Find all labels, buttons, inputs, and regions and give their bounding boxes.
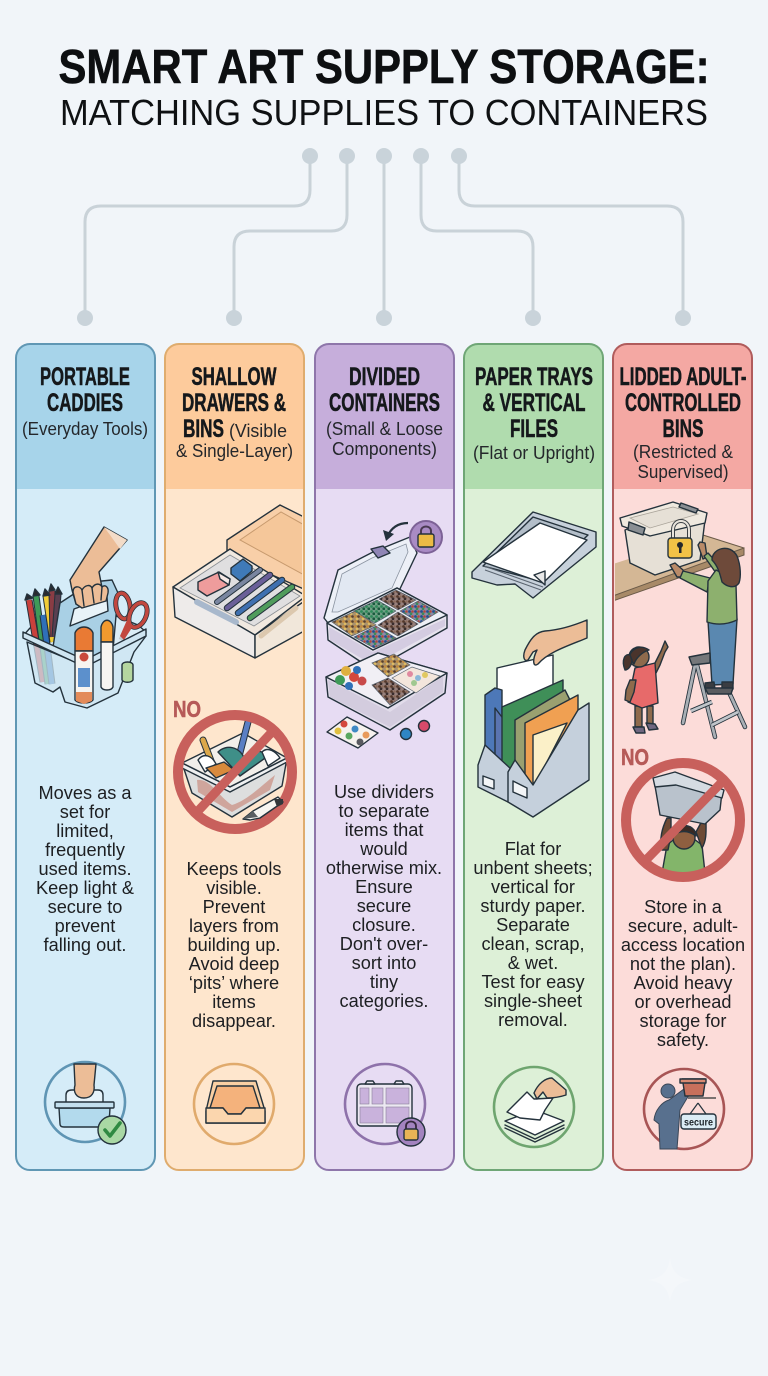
heading: paper trays: & VERTICAL (482, 389, 586, 417)
panel: paper trays and vertical files (464, 344, 603, 1170)
heading: paper trays: FILES (510, 415, 558, 443)
body text: lidded bins (621, 897, 745, 1050)
label: NO: NO (173, 696, 201, 722)
body text: divided containers: items that (345, 820, 423, 840)
body text: divided containers: would (359, 839, 408, 859)
body text: divided containers: closure. (352, 915, 416, 935)
body text: paper trays: sturdy paper. (480, 896, 586, 916)
heading: divided containers: Components) (332, 439, 437, 459)
panel: portable caddies (16, 344, 155, 1170)
right holder (508, 703, 589, 817)
body text: lidded bins: storage for (640, 1011, 726, 1031)
pens (217, 570, 292, 618)
loose sheet (327, 717, 378, 748)
no symbol (178, 715, 292, 829)
body text: portable caddies: secure to (48, 897, 122, 917)
shelf (615, 536, 742, 594)
title: MATCHING SUPPLIES TO CONTAINERS (60, 92, 708, 133)
body text: shallow drawers: Avoid deep (189, 954, 279, 974)
body text: paper trays: single-sheet (484, 991, 582, 1011)
heading: divided containers: CONTAINERS (329, 389, 440, 417)
body text: shallow drawers: items (212, 992, 256, 1012)
adult (708, 619, 737, 685)
body text: paper trays: unbent sheets; (473, 858, 593, 878)
body text: paper trays: Flat for (505, 839, 561, 859)
lock (673, 521, 689, 540)
body text: divided containers: to separate (338, 801, 430, 821)
icon: person placing box on shelf, secure sign: secure (684, 1116, 713, 1128)
body text: paper trays: Separate (496, 915, 570, 935)
illustration: caddy with hand and tools (23, 527, 151, 708)
body text: paper trays: removal. (498, 1010, 568, 1030)
hand (524, 620, 587, 665)
icon: open tray (194, 1064, 274, 1144)
body text: paper trays: vertical for (491, 877, 575, 897)
icon: basket with check (45, 1062, 126, 1144)
body text: paper trays: & wet. (508, 953, 558, 973)
heading: lidded bins: BINS (662, 415, 704, 443)
body text: shallow drawers: disappear. (192, 1011, 276, 1031)
body text: paper trays: Test for easy (481, 972, 585, 992)
body text: lidded bins: secure, adult- (628, 916, 738, 936)
icon: person placing box on shelf, secure sign (644, 1069, 724, 1149)
lid and arrow (324, 537, 417, 623)
basket front (27, 636, 146, 708)
body text: divided containers: Ensure (355, 877, 413, 897)
body text: lidded bins: safety. (657, 1030, 709, 1050)
body text: divided containers: Use dividers (334, 782, 434, 802)
body text: lidded bins: Avoid heavy (634, 973, 733, 993)
illustration: vertical files with hand (478, 620, 589, 817)
heading: lidded bins: (Restricted & (633, 442, 733, 462)
panel: shallow drawers and bins (165, 344, 306, 1170)
illustration: flat paper tray (472, 512, 596, 598)
heading: shallow drawers and bins: BINS (183, 415, 224, 443)
body text: portable caddies: set for (60, 802, 110, 822)
body text: shallow drawers: layers from (189, 916, 279, 936)
label: NO: NO (621, 744, 649, 770)
heading: paper trays: PAPER TRAYS (475, 363, 593, 391)
connector lines from title to the five columns (77, 148, 691, 326)
lower tray (326, 653, 447, 730)
body text: divided containers: Don't over- (340, 934, 428, 954)
heading: divided containers (326, 363, 443, 459)
body text: portable caddies: limited, (56, 821, 114, 841)
hand (70, 527, 127, 604)
body text: paper trays (473, 839, 593, 1030)
body text: shallow drawers: building up. (187, 935, 281, 955)
heading: lidded bins: Supervised) (638, 462, 728, 482)
heading: portable caddies (22, 363, 148, 439)
panel: divided containers (315, 344, 454, 1170)
child (635, 706, 653, 727)
body text: shallow drawers: ‘pits’ where (189, 973, 279, 993)
illustration: deep messy bin crossed out (178, 715, 292, 829)
body text: portable caddies: used items. (38, 859, 132, 879)
heading: portable caddies: CADDIES (47, 389, 123, 417)
heading: paper trays (473, 363, 595, 463)
body text: divided containers: sort into (352, 953, 416, 973)
body text: paper trays: clean, scrap, (481, 934, 585, 954)
scissors (114, 592, 151, 640)
body text: divided containers: otherwise mix. (326, 858, 442, 878)
body text: divided containers: tiny (370, 972, 399, 992)
watermark sparkle (648, 1258, 692, 1302)
body text: shallow drawers: visible. (206, 878, 262, 898)
step ladder (683, 653, 745, 737)
body text: divided containers: categories. (340, 991, 428, 1011)
heading: portable caddies: PORTABLE (40, 363, 130, 391)
body text: portable caddies: falling out. (44, 935, 126, 955)
loose beads (400, 728, 412, 740)
panel: lidded adult-controlled bins (610, 344, 752, 1170)
glue sticks (75, 627, 93, 651)
heading: divided containers: DIVIDED (349, 363, 420, 391)
bin (624, 524, 706, 576)
illustration: adult storing locked bin on shelf (610, 502, 745, 737)
body text: lidded bins: not the plan). (630, 954, 736, 974)
body text: portable caddies: Moves as a (38, 783, 132, 803)
heading: shallow drawers and bins: DRAWERS & (182, 389, 286, 417)
icon: paper stack and hand (494, 1067, 574, 1147)
heading: shallow drawers and bins (176, 363, 293, 461)
illustration: shallow drawer with pens (173, 505, 306, 658)
heading: divided containers: (Small & Loose (326, 419, 443, 439)
illustration: divided containers with lock (324, 521, 447, 748)
heading: paper trays: (Flat or Upright) (473, 443, 595, 463)
illustration: child lifting heavy bin crossed out (626, 763, 740, 877)
heading: lidded bins (620, 363, 746, 482)
upper tray (327, 588, 447, 670)
sharpener (231, 559, 252, 581)
body text: lidded bins: Store in a (644, 897, 723, 917)
left holder (478, 745, 512, 802)
eraser (198, 572, 230, 596)
body text: divided containers: secure (357, 896, 411, 916)
heading: portable caddies: (Everyday Tools) (22, 419, 148, 439)
body text: portable caddies (36, 783, 134, 955)
body text: portable caddies: Keep light & (36, 878, 134, 898)
heading: shallow drawers and bins: & Single-Layer) (176, 441, 293, 461)
body text: shallow drawers: Prevent (203, 897, 265, 917)
title (58, 41, 710, 133)
body text: shallow drawers: Keeps tools (186, 859, 282, 879)
body text: shallow drawers (186, 859, 282, 1031)
body text: divided containers (326, 782, 442, 1011)
body text: lidded bins: access location (621, 935, 745, 955)
heading: shallow drawers and bins: (Visible (229, 421, 287, 441)
heading: shallow drawers and bins: SHALLOW (192, 363, 277, 391)
body text: portable caddies: frequently (45, 840, 126, 860)
marker (243, 797, 283, 820)
handle (53, 580, 118, 662)
icon: divided box with lock (345, 1064, 425, 1146)
body text: portable caddies: prevent (55, 916, 115, 936)
body text: lidded bins: or overhead (634, 992, 732, 1012)
